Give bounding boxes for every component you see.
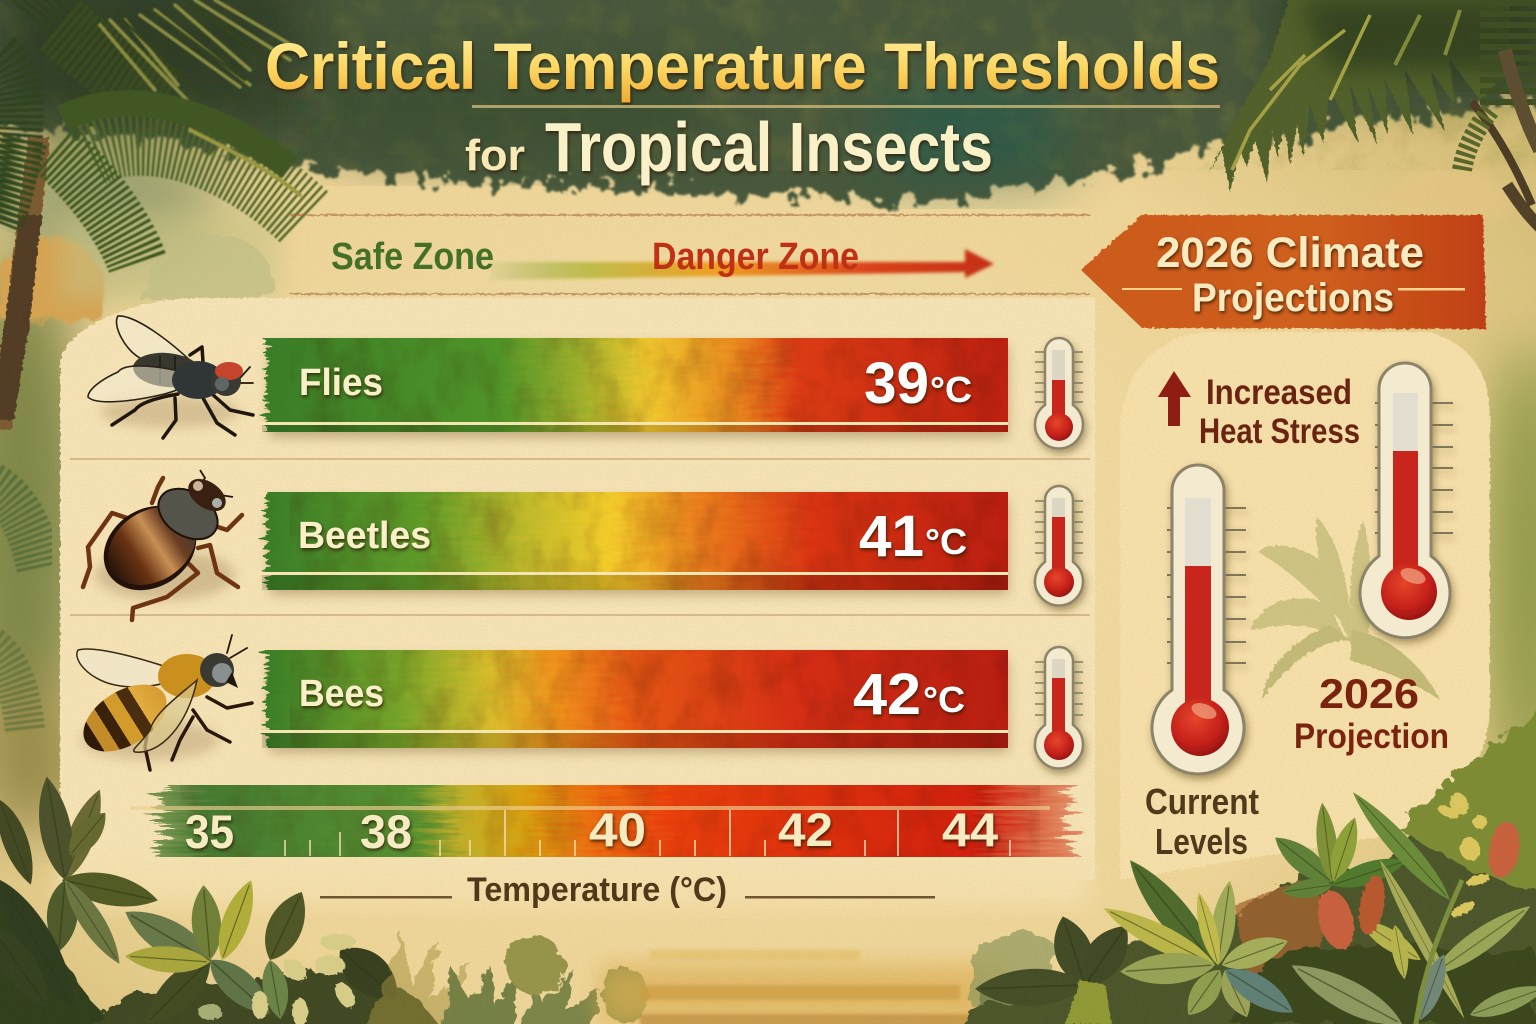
banner: 2026 climate projections xyxy=(1081,215,1486,329)
safe zone label: Safe Zone xyxy=(331,236,494,278)
scale numbers: 44 xyxy=(942,803,998,856)
beetles label: Beetles xyxy=(298,515,431,557)
bottom left ground mass xyxy=(90,971,450,1024)
fade of main panel lower edge xyxy=(60,860,1090,905)
banner: 2026 climate projections: Projections xyxy=(1192,276,1394,320)
title line one: Critical Temperature Thresholds xyxy=(265,29,1220,103)
scale numbers: 35 xyxy=(185,805,234,858)
panel: flies row xyxy=(70,316,1090,460)
hazy grass and low trees xyxy=(370,930,649,1024)
left foliage beside panel xyxy=(0,480,40,730)
current levels label xyxy=(1145,781,1259,862)
current levels label: Levels xyxy=(1155,821,1248,862)
bees bar xyxy=(258,650,1046,752)
increased heat stress label: Increased xyxy=(1206,373,1352,412)
axis label: Temperature (°C) xyxy=(467,871,727,909)
title line two: Tropical Insects xyxy=(545,108,993,186)
danger zone label: Danger Zone xyxy=(652,236,859,278)
panel: climate comparison xyxy=(1145,363,1453,862)
orange haze left xyxy=(0,232,271,320)
icon: beetle xyxy=(83,470,242,620)
canopy blotches xyxy=(0,0,1536,170)
climate panel xyxy=(1120,332,1490,880)
ochre ground stripes xyxy=(600,965,1010,1024)
2026 projection label: 2026 xyxy=(1319,670,1419,717)
bottom right plant two xyxy=(1098,851,1300,1024)
icon: small thermometer bees xyxy=(1035,647,1083,768)
zone legend xyxy=(290,214,1090,295)
icon: fly xyxy=(88,316,253,438)
scale band xyxy=(160,785,1070,857)
scale numbers: 38 xyxy=(360,805,412,858)
left palm trunk xyxy=(0,137,50,430)
scale numbers: 40 xyxy=(589,803,646,856)
side haze foliage xyxy=(0,130,1536,840)
beetles value: 41 xyxy=(859,504,924,569)
bottom right plant one xyxy=(974,911,1141,1024)
bottom left plant two xyxy=(117,876,411,1024)
increased heat stress label xyxy=(1199,373,1360,451)
bees label: Bees xyxy=(299,673,384,715)
red buds xyxy=(1312,820,1524,953)
top canopy xyxy=(0,0,1536,201)
scale numbers: 42 xyxy=(778,803,833,856)
banner: 2026 climate projections: 2026 Climate xyxy=(1156,229,1424,277)
icon: small thermometer flies xyxy=(1035,338,1083,448)
pale flowers xyxy=(198,934,359,1024)
icon: bee xyxy=(72,635,252,770)
cream cloud right xyxy=(1360,164,1510,220)
flies value: 39 xyxy=(864,351,929,416)
icon: small thermometer beetles xyxy=(1035,486,1083,605)
beetles bar xyxy=(258,492,1046,594)
icon: up arrow xyxy=(1158,371,1191,426)
bees bar: °C xyxy=(923,679,965,720)
yellow small leaves xyxy=(1436,791,1491,920)
flies bar xyxy=(258,338,1046,437)
bottom right foliage mass xyxy=(960,770,1536,1024)
panel: beetles row xyxy=(70,470,1090,620)
left palm fronds xyxy=(0,0,305,265)
scale numbers xyxy=(185,803,998,858)
bottom right plant three xyxy=(1268,785,1536,1024)
zone arrow xyxy=(490,249,994,280)
title xyxy=(265,29,1220,186)
panel: bees row xyxy=(72,635,1083,770)
current levels label: Current xyxy=(1145,781,1259,822)
right palm fronds xyxy=(1208,0,1536,232)
icon: current levels thermometer xyxy=(1152,465,1246,774)
flies label: Flies xyxy=(299,362,383,404)
title line two prefix: for xyxy=(465,131,525,180)
temperature scale xyxy=(130,785,1070,909)
2026 projection label xyxy=(1294,670,1449,756)
2026 projection label: Projection xyxy=(1294,717,1449,756)
beetles bar: °C xyxy=(925,521,967,562)
flies bar: °C xyxy=(930,369,972,410)
main cream panel xyxy=(60,298,1095,880)
bees value: 42 xyxy=(853,662,921,727)
increased heat stress label: Heat Stress xyxy=(1199,412,1360,451)
faint palm silhouette in right panel xyxy=(1250,517,1440,700)
left bottom plant xyxy=(0,774,161,1024)
icon: 2026 projection thermometer xyxy=(1360,363,1453,638)
